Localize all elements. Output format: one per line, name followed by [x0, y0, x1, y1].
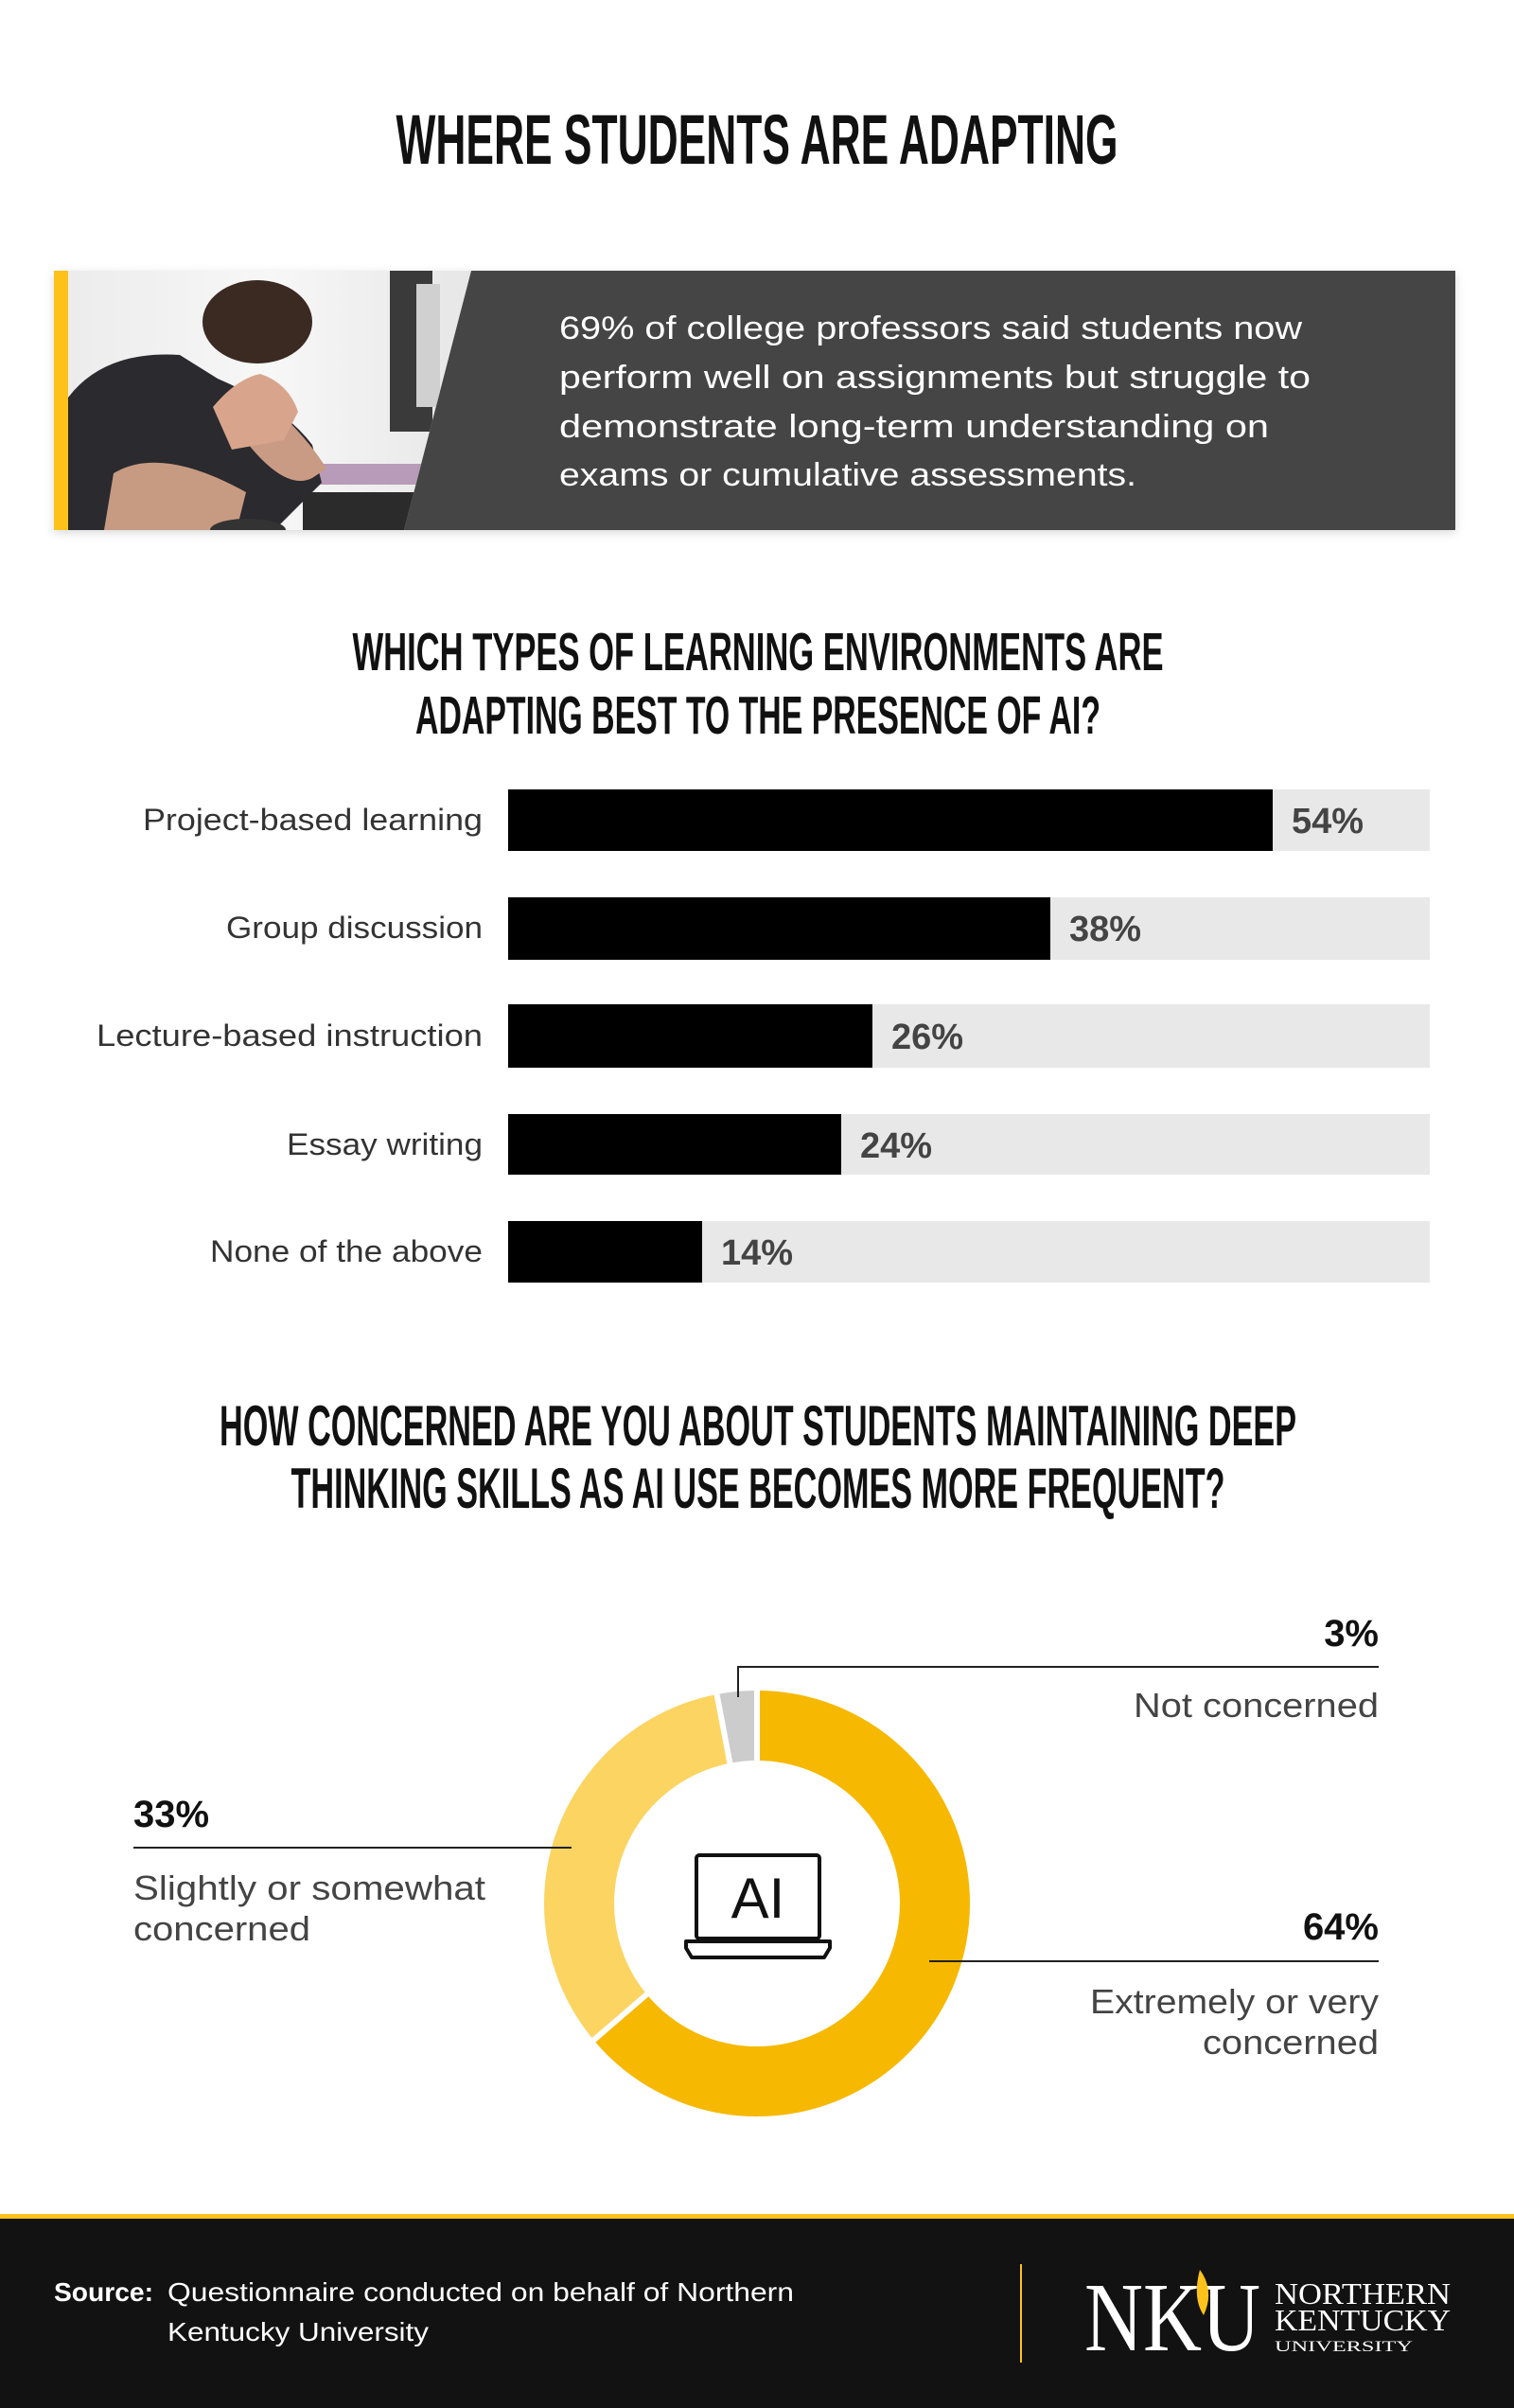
source text: Questionnaire conducted on behalf of Northern	[167, 2277, 794, 2307]
stat text: perform well on assignments but struggle to	[559, 360, 1311, 396]
bar: Essay writing: Essay writing	[287, 1127, 483, 1161]
callout: 33% slightly or somewhat concerned: Slightly or somewhat	[133, 1868, 485, 1907]
stat text: 69% of college professors said students now	[559, 310, 1303, 346]
stat text	[559, 310, 1311, 493]
callout: 33% slightly or somewhat concerned	[133, 1794, 572, 1948]
bar: Lecture-based instruction	[97, 1004, 1430, 1068]
callout: 3% not concerned: Not concerned	[1134, 1686, 1379, 1725]
bar: Group discussion: Group discussion	[226, 911, 483, 945]
callout: 33% slightly or somewhat concerned: concerned	[133, 1909, 310, 1948]
callout: 64% extremely or very concerned: Extremely or very	[1090, 1982, 1379, 2021]
heading: concern about deep thinking	[220, 1394, 1296, 1520]
accent bar	[54, 271, 68, 530]
bar: Group discussion	[226, 897, 1430, 960]
bar: None of the above	[210, 1221, 1430, 1283]
bar: Essay writing	[287, 1114, 1430, 1175]
bar: Group discussion: 38%	[1069, 910, 1141, 949]
callout: 3% not concerned	[738, 1613, 1379, 1725]
logo: NKU: KENTUCKY	[1275, 2303, 1451, 2337]
bar: Project-based learning: Project-based learning	[143, 803, 483, 837]
logo: NKU: UNIVERSITY	[1275, 2339, 1414, 2355]
bar: Lecture-based instruction: Lecture-based instruction	[97, 1018, 483, 1053]
logo: NKU: NKU	[1084, 2263, 1260, 2372]
photo: stressed student	[68, 271, 475, 541]
bar chart	[97, 789, 1430, 1283]
bar: None of the above: None of the above	[210, 1234, 483, 1268]
logo: NKU: NORTHERN	[1275, 2276, 1451, 2311]
bar: None of the above: 14%	[721, 1233, 793, 1273]
donut chart	[579, 1685, 935, 2081]
stat text: exams or cumulative assessments.	[559, 457, 1136, 493]
source text	[54, 2277, 794, 2346]
bar: Essay writing: 24%	[860, 1126, 932, 1166]
bar: Lecture-based instruction: 26%	[891, 1018, 963, 1057]
icon: laptop with AI: AI	[731, 1867, 784, 1930]
callout: 64% extremely or very concerned: 64%	[1303, 1906, 1379, 1948]
footer	[0, 2214, 1514, 2408]
callout: 3% not concerned: 3%	[1324, 1613, 1379, 1655]
source text: Source:	[54, 2277, 153, 2307]
stat text: demonstrate long-term understanding on	[559, 409, 1269, 445]
source text: Kentucky University	[167, 2317, 429, 2346]
icon: laptop with AI	[686, 1855, 830, 1957]
callout: 33% slightly or somewhat concerned: 33%	[133, 1794, 209, 1835]
bar: Project-based learning: 54%	[1292, 802, 1364, 841]
panel: stat callout with photo	[54, 271, 1455, 541]
callout: 64% extremely or very concerned: concerned	[1203, 2023, 1379, 2062]
heading: learning environments	[352, 622, 1164, 746]
bar: Project-based learning	[143, 789, 1430, 851]
logo: NKU	[1084, 2263, 1451, 2372]
callout: 64% extremely or very concerned	[929, 1906, 1379, 2062]
